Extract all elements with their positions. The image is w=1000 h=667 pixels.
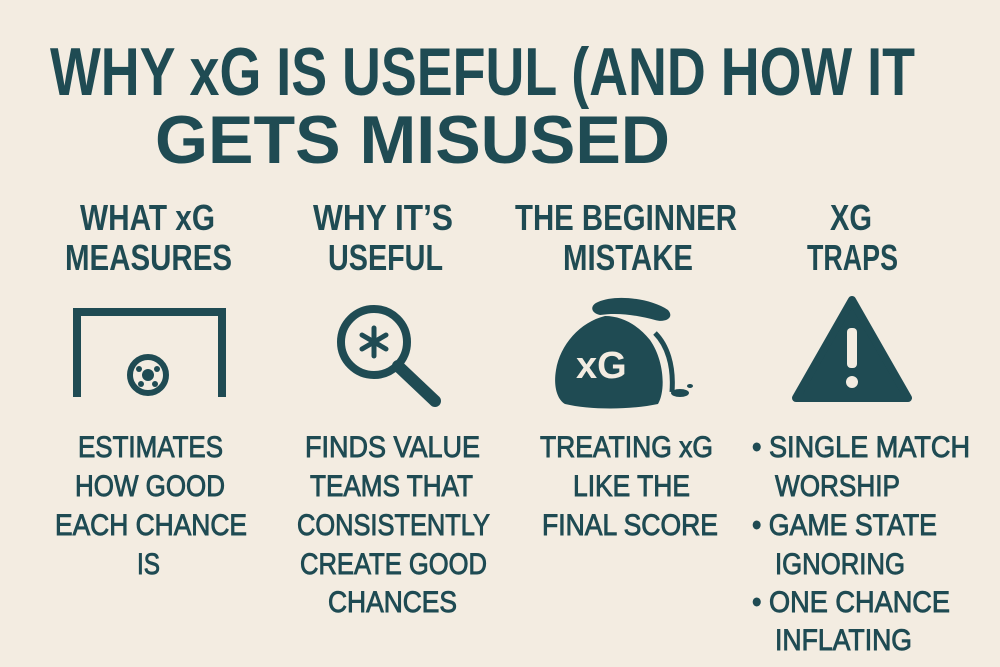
heading: what xG measures: MEASURES: [65, 237, 232, 278]
text: why it's useful: CONSISTENTLY: [297, 509, 490, 542]
text: beginner mistake: FINAL SCORE: [542, 509, 718, 542]
text: beginner mistake: LIKE THE: [573, 470, 690, 503]
text: why it's useful: FINDS VALUE: [305, 431, 480, 464]
text: what xG measures: ESTIMATES: [78, 431, 223, 464]
icon: xG money bag: [555, 298, 693, 408]
panel: xG traps: [752, 197, 970, 657]
text: traps list: INFLATING: [775, 624, 912, 657]
text: what xG measures: [55, 431, 247, 581]
heading: xG traps: TRAPS: [807, 237, 898, 278]
title: GETS MISUSED: [155, 102, 670, 178]
panel: the beginner mistake: [515, 197, 737, 542]
text: traps list: IGNORING: [775, 548, 905, 581]
heading: beginner mistake: [515, 197, 737, 278]
text: what xG measures: IS: [137, 548, 160, 581]
heading: beginner mistake: MISTAKE: [563, 237, 693, 278]
text: why it's useful: CHANCES: [328, 586, 457, 619]
heading: beginner mistake: THE BEGINNER: [515, 197, 737, 238]
text: beginner mistake: [540, 431, 718, 542]
text: what xG measures: HOW GOOD: [75, 470, 225, 503]
heading: what xG measures: [65, 197, 232, 278]
icon: xG money bag: xG: [576, 345, 627, 387]
panel: why it's useful: [297, 197, 490, 619]
text: traps list: • GAME STATE: [752, 509, 937, 542]
text: traps list: WORSHIP: [775, 470, 900, 503]
text: traps list: • SINGLE MATCH: [752, 431, 970, 464]
heading: what xG measures: WHAT xG: [80, 197, 215, 238]
text: what xG measures: EACH CHANCE: [55, 509, 247, 542]
icon: magnifying glass: [341, 309, 435, 401]
icon: warning triangle: [796, 300, 908, 398]
heading: why it's useful: [313, 197, 453, 278]
text: why it's useful: CREATE GOOD: [300, 548, 487, 581]
icon: goal with ball: [77, 312, 222, 397]
text: why it's useful: [297, 431, 490, 619]
text: beginner mistake: TREATING xG: [540, 431, 713, 464]
panel: what xG measures: [55, 197, 247, 581]
heading: why it's useful: WHY IT’S: [313, 197, 453, 238]
heading: why it's useful: USEFUL: [328, 237, 443, 278]
heading: xG traps: XG: [830, 197, 872, 238]
text: why it's useful: TEAMS THAT: [310, 470, 473, 503]
title: [50, 34, 915, 178]
heading: xG traps: [807, 197, 898, 278]
text: traps list: • ONE CHANCE: [752, 586, 950, 619]
text: traps list: [752, 431, 970, 657]
